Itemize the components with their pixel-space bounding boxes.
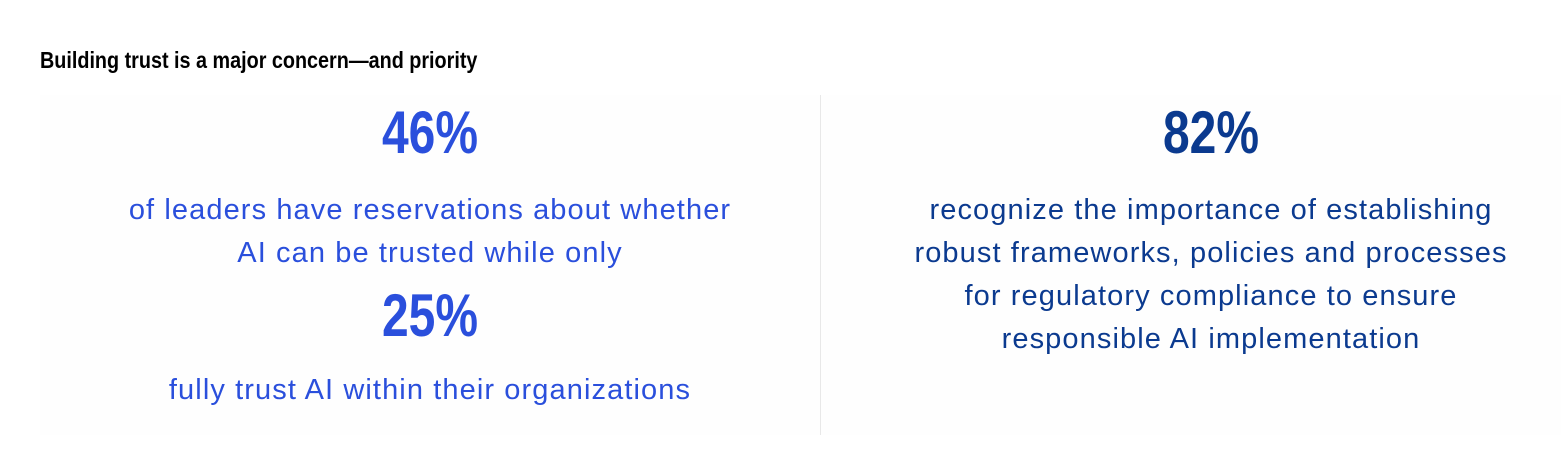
text: reservations	[129, 194, 731, 269]
text: frameworks: robust frameworks, policies and processes	[914, 237, 1508, 269]
text: reservations: of leaders have reservations about whether	[129, 194, 731, 226]
panel: left stats	[40, 95, 820, 435]
panel: right stats	[821, 95, 1561, 435]
stat: 82%: 82%	[1163, 99, 1259, 166]
text: frameworks: recognize the importance of establishing	[929, 194, 1493, 226]
text: fully trust: fully trust AI within their organizations	[169, 374, 691, 406]
text: frameworks: for regulatory compliance to ensure	[964, 280, 1458, 312]
text: frameworks: responsible AI implementation	[1002, 323, 1420, 355]
divider	[820, 95, 821, 435]
text: frameworks	[914, 194, 1508, 355]
text: reservations: AI can be trusted while only	[237, 237, 623, 269]
stat: 25%: 25%	[382, 282, 478, 349]
title: Building trust is a major concern—and priority	[40, 47, 477, 73]
stat: 46%: 46%	[382, 99, 478, 166]
